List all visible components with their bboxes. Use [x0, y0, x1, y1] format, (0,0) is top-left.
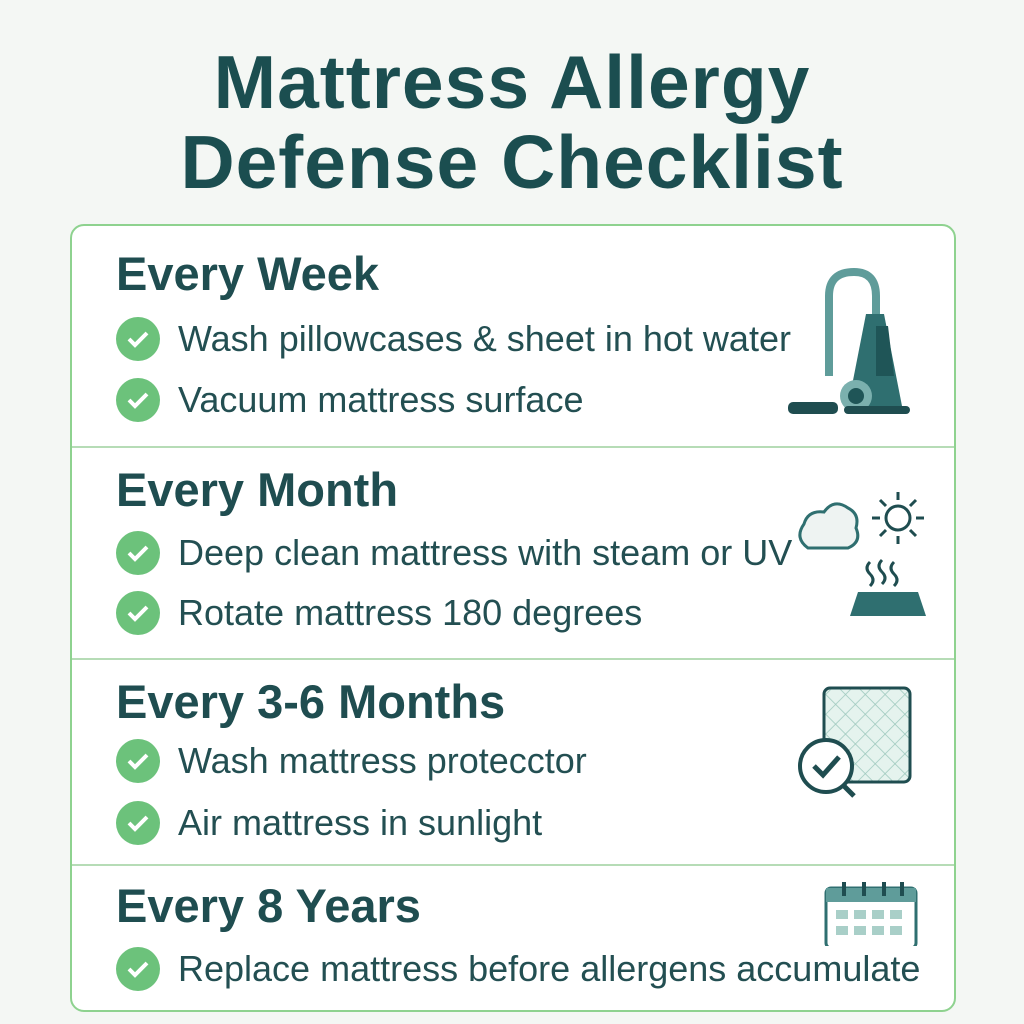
title: Defense Checklist: [180, 120, 844, 204]
icon: steam and sun: [798, 492, 926, 616]
title: [180, 40, 844, 204]
item: deep clean: Deep clean mattress with steam or UV: [178, 532, 792, 573]
item: air in sunlight: Air mattress in sunlight: [178, 802, 542, 843]
item: wash pillowcases: Wash pillowcases & sheet in hot water: [178, 318, 791, 359]
item: wash protector: Wash mattress protecctor: [178, 740, 587, 781]
heading: every 8 years: Every 8 Years: [116, 879, 421, 932]
icon: calendar: [824, 882, 918, 946]
title: Mattress Allergy: [214, 40, 810, 124]
section: every 3-6 months: [116, 675, 912, 845]
icon: vacuum: [788, 268, 910, 414]
section: every month: [116, 463, 926, 635]
item: replace mattress: Replace mattress before allergens accumulate: [178, 948, 920, 989]
heading: every week: Every Week: [116, 247, 379, 300]
section: every week: [116, 247, 910, 422]
item: rotate: Rotate mattress 180 degrees: [178, 592, 642, 633]
panel: checklist card: [70, 224, 956, 1012]
item: vacuum: Vacuum mattress surface: [178, 379, 583, 420]
heading: every 3-6 months: Every 3-6 Months: [116, 675, 505, 728]
heading: every month: Every Month: [116, 463, 398, 516]
section: every 8 years: [116, 879, 920, 991]
icon: protector with magnifier: [798, 686, 912, 798]
